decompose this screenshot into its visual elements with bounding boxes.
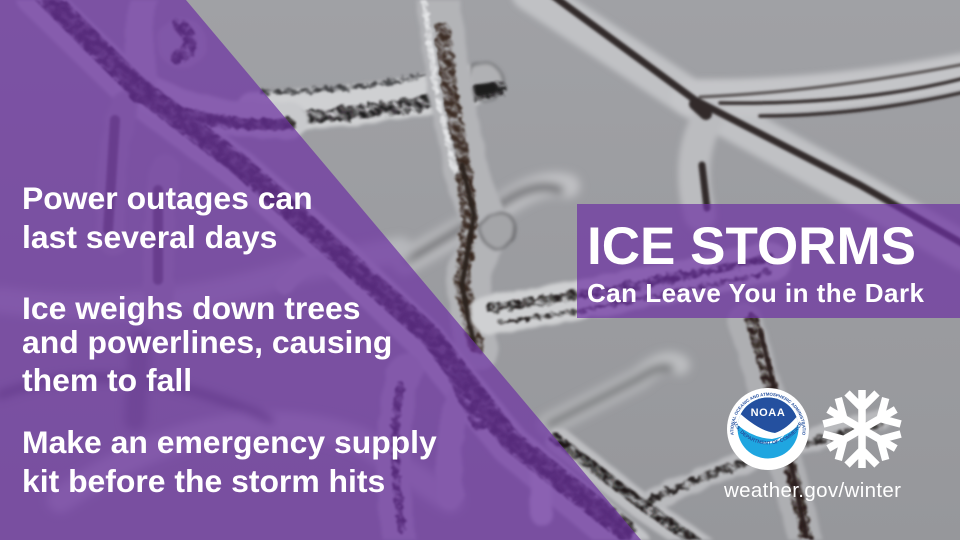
message: supply kit: Make an emergency supply xyxy=(22,424,437,460)
panel: title banner xyxy=(577,204,960,318)
branch: lower right xyxy=(555,320,880,540)
seal ring text: NATIONAL OCEANIC AND ATMOSPHERIC ADMINISTRATION xyxy=(730,392,806,435)
message: supply kit: kit before the storm hits xyxy=(22,463,385,499)
branch: top-right fork xyxy=(530,0,960,252)
icon: snowflake xyxy=(821,390,903,468)
message: falling trees: Ice weighs down trees xyxy=(22,290,360,326)
panel: purple diagonal overlay xyxy=(0,0,641,540)
message: power outages: Power outages can xyxy=(22,180,313,216)
branch: main left diagonal xyxy=(35,0,630,540)
branch: horizontal with knob xyxy=(255,63,503,118)
icon: NOAA seal xyxy=(727,388,809,470)
message: power outages: last several days xyxy=(22,219,277,255)
message: falling trees: them to fall xyxy=(22,362,192,398)
branch: main vertical icicle xyxy=(424,0,516,350)
message: falling trees: and powerlines, causing xyxy=(22,324,392,360)
icon: NOAA seal: U.S. DEPARTMENT OF COMMERCE xyxy=(734,422,802,444)
NOAA wordmark: NOAA xyxy=(751,407,785,419)
branch: mid horizontal xyxy=(490,258,770,322)
subtitle: Can Leave You in the Dark xyxy=(587,278,925,308)
link: weather.gov/winter: weather.gov/winter xyxy=(723,479,901,502)
title: ICE STORMS xyxy=(587,217,916,276)
blurred distant branches xyxy=(0,184,680,500)
text block: safety messages xyxy=(22,180,437,499)
